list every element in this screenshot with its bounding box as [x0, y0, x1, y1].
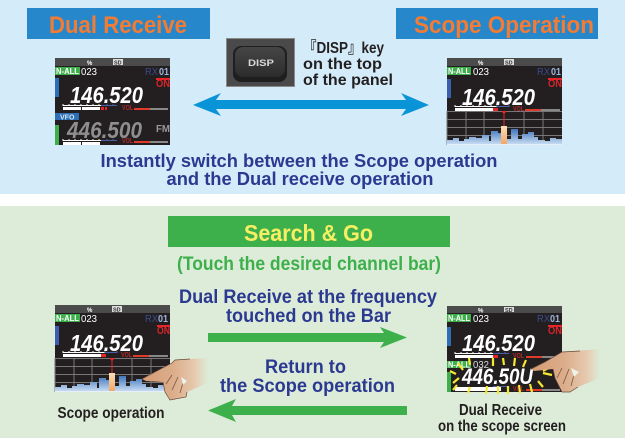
screen: scope operation with touch: %: [87, 308, 93, 314]
text: dual receive at touched frequency: touched on the Bar: [226, 306, 392, 327]
text: DISP key note: 『DISP』key: [303, 39, 384, 57]
screen: dual receive display: VFO: [60, 114, 75, 122]
screen: dual receive display: 146.520: [70, 82, 143, 108]
text: touch instruction: (Touch the desired channel bar): [177, 254, 441, 275]
screen: scope operation display: %: [478, 61, 484, 67]
screen: dual receive on scope: %: [478, 308, 484, 314]
screen: scope operation display: ON: [548, 78, 562, 90]
screen: scope operation with touch: N-ALL: [56, 314, 79, 323]
screen: dual receive on scope: 032: [473, 360, 489, 371]
icon: pointing hand on scope: [142, 358, 208, 400]
screen: scope operation display: [447, 58, 562, 145]
heading: Search & Go: Search & Go: [244, 220, 373, 246]
text: return to scope: the Scope operation: [220, 376, 395, 397]
heading: Scope Operation: Scope Operation: [414, 12, 594, 39]
screen: scope operation with touch: RX: [145, 314, 158, 325]
icon: DISP key: [226, 38, 295, 87]
screen: scope operation with touch: 023: [81, 314, 97, 325]
screen: dual receive display: %: [87, 61, 93, 67]
text: DISP key note: [303, 39, 393, 89]
screen: scope operation with touch: SD: [113, 308, 121, 314]
text: dual receive at touched frequency: [179, 287, 437, 327]
screen: dual receive on scope: 01: [550, 314, 560, 325]
text: DISP key note: on the top: [303, 56, 382, 73]
screen: dual receive display: RX: [145, 67, 158, 78]
screen: scope operation display: 01: [551, 67, 561, 78]
heading: Search & Go: [168, 216, 450, 247]
screen: dual receive display: 01: [159, 67, 169, 78]
screen: scope operation display: SD: [505, 60, 513, 66]
screen: scope operation display: VOL: [513, 106, 525, 113]
screen: scope operation display: N-ALL: [448, 67, 470, 76]
screen: scope operation with touch: [55, 305, 170, 392]
text: return to scope: Return to: [265, 357, 346, 378]
screen: dual receive display: ON: [156, 78, 170, 90]
panel: DISP key switching: [0, 0, 625, 194]
screen: scope operation display: 023: [473, 67, 489, 78]
text: DISP key note: of the panel: [303, 72, 393, 89]
icon: DISP key: DISP: [248, 58, 274, 68]
screen: dual receive on scope: VOL: [513, 386, 525, 393]
arrow: right to dual receive: [208, 327, 407, 348]
screen: dual receive on scope: 023: [473, 314, 489, 325]
screen: dual receive display: VOL: [122, 105, 134, 112]
screen: dual receive display: N-ALL: [56, 67, 79, 76]
screen: scope operation display: RX: [537, 67, 550, 78]
screen: dual receive on scope: N-ALL: [448, 314, 470, 323]
text: return to scope: [220, 357, 395, 397]
screen: dual receive display: VOL: [122, 138, 134, 145]
text: instant switch caption: Instantly switch between the Scope operation: [100, 150, 498, 171]
screen: dual receive display: 023: [81, 67, 97, 78]
screen: dual receive on scope: RX: [537, 314, 550, 325]
arrow: left to scope: [208, 399, 407, 422]
heading: Dual Receive: Dual Receive: [49, 12, 187, 39]
screen: scope operation display: 146.520: [462, 84, 535, 110]
label: Dual Receive on the scope screen: Dual Receive: [459, 402, 542, 419]
screen: dual receive display: [55, 58, 170, 145]
screen: dual receive on scope: 446.50U: [461, 364, 534, 389]
arrow: two-way switch: [193, 93, 429, 116]
icon: pointing hand on dual display: [531, 349, 600, 392]
screen: dual receive on scope: [447, 306, 562, 394]
text: dual receive at touched frequency: Dual Receive at the frequency: [179, 287, 437, 308]
panel: Search and Go: [0, 206, 625, 438]
screen: scope operation with touch: 01: [158, 314, 168, 325]
screen: dual receive on scope: VOL: [513, 353, 525, 360]
label: Dual Receive on the scope screen: [438, 402, 566, 435]
screen: dual receive display: SD: [114, 60, 122, 66]
screen: dual receive display: 446.500: [66, 117, 142, 143]
screen: dual receive on scope: ON: [548, 325, 562, 337]
text: instant switch caption: and the Dual receive operation: [166, 168, 434, 189]
label: Dual Receive on the scope screen: on the scope screen: [438, 418, 566, 435]
text: instant switch caption: [100, 150, 498, 189]
label: Scope operation: Scope operation: [58, 405, 164, 422]
screen: dual receive display: FM: [156, 124, 170, 135]
screen: dual receive on scope: N-ALL: [448, 360, 470, 370]
screen: dual receive on scope: 146.520: [462, 330, 535, 356]
screen: scope operation with touch: VOL: [121, 352, 133, 359]
screen: scope operation with touch: 146.520: [70, 330, 143, 356]
screen: scope operation with touch: ON: [157, 325, 170, 337]
screen: dual receive on scope: SD: [505, 308, 513, 314]
